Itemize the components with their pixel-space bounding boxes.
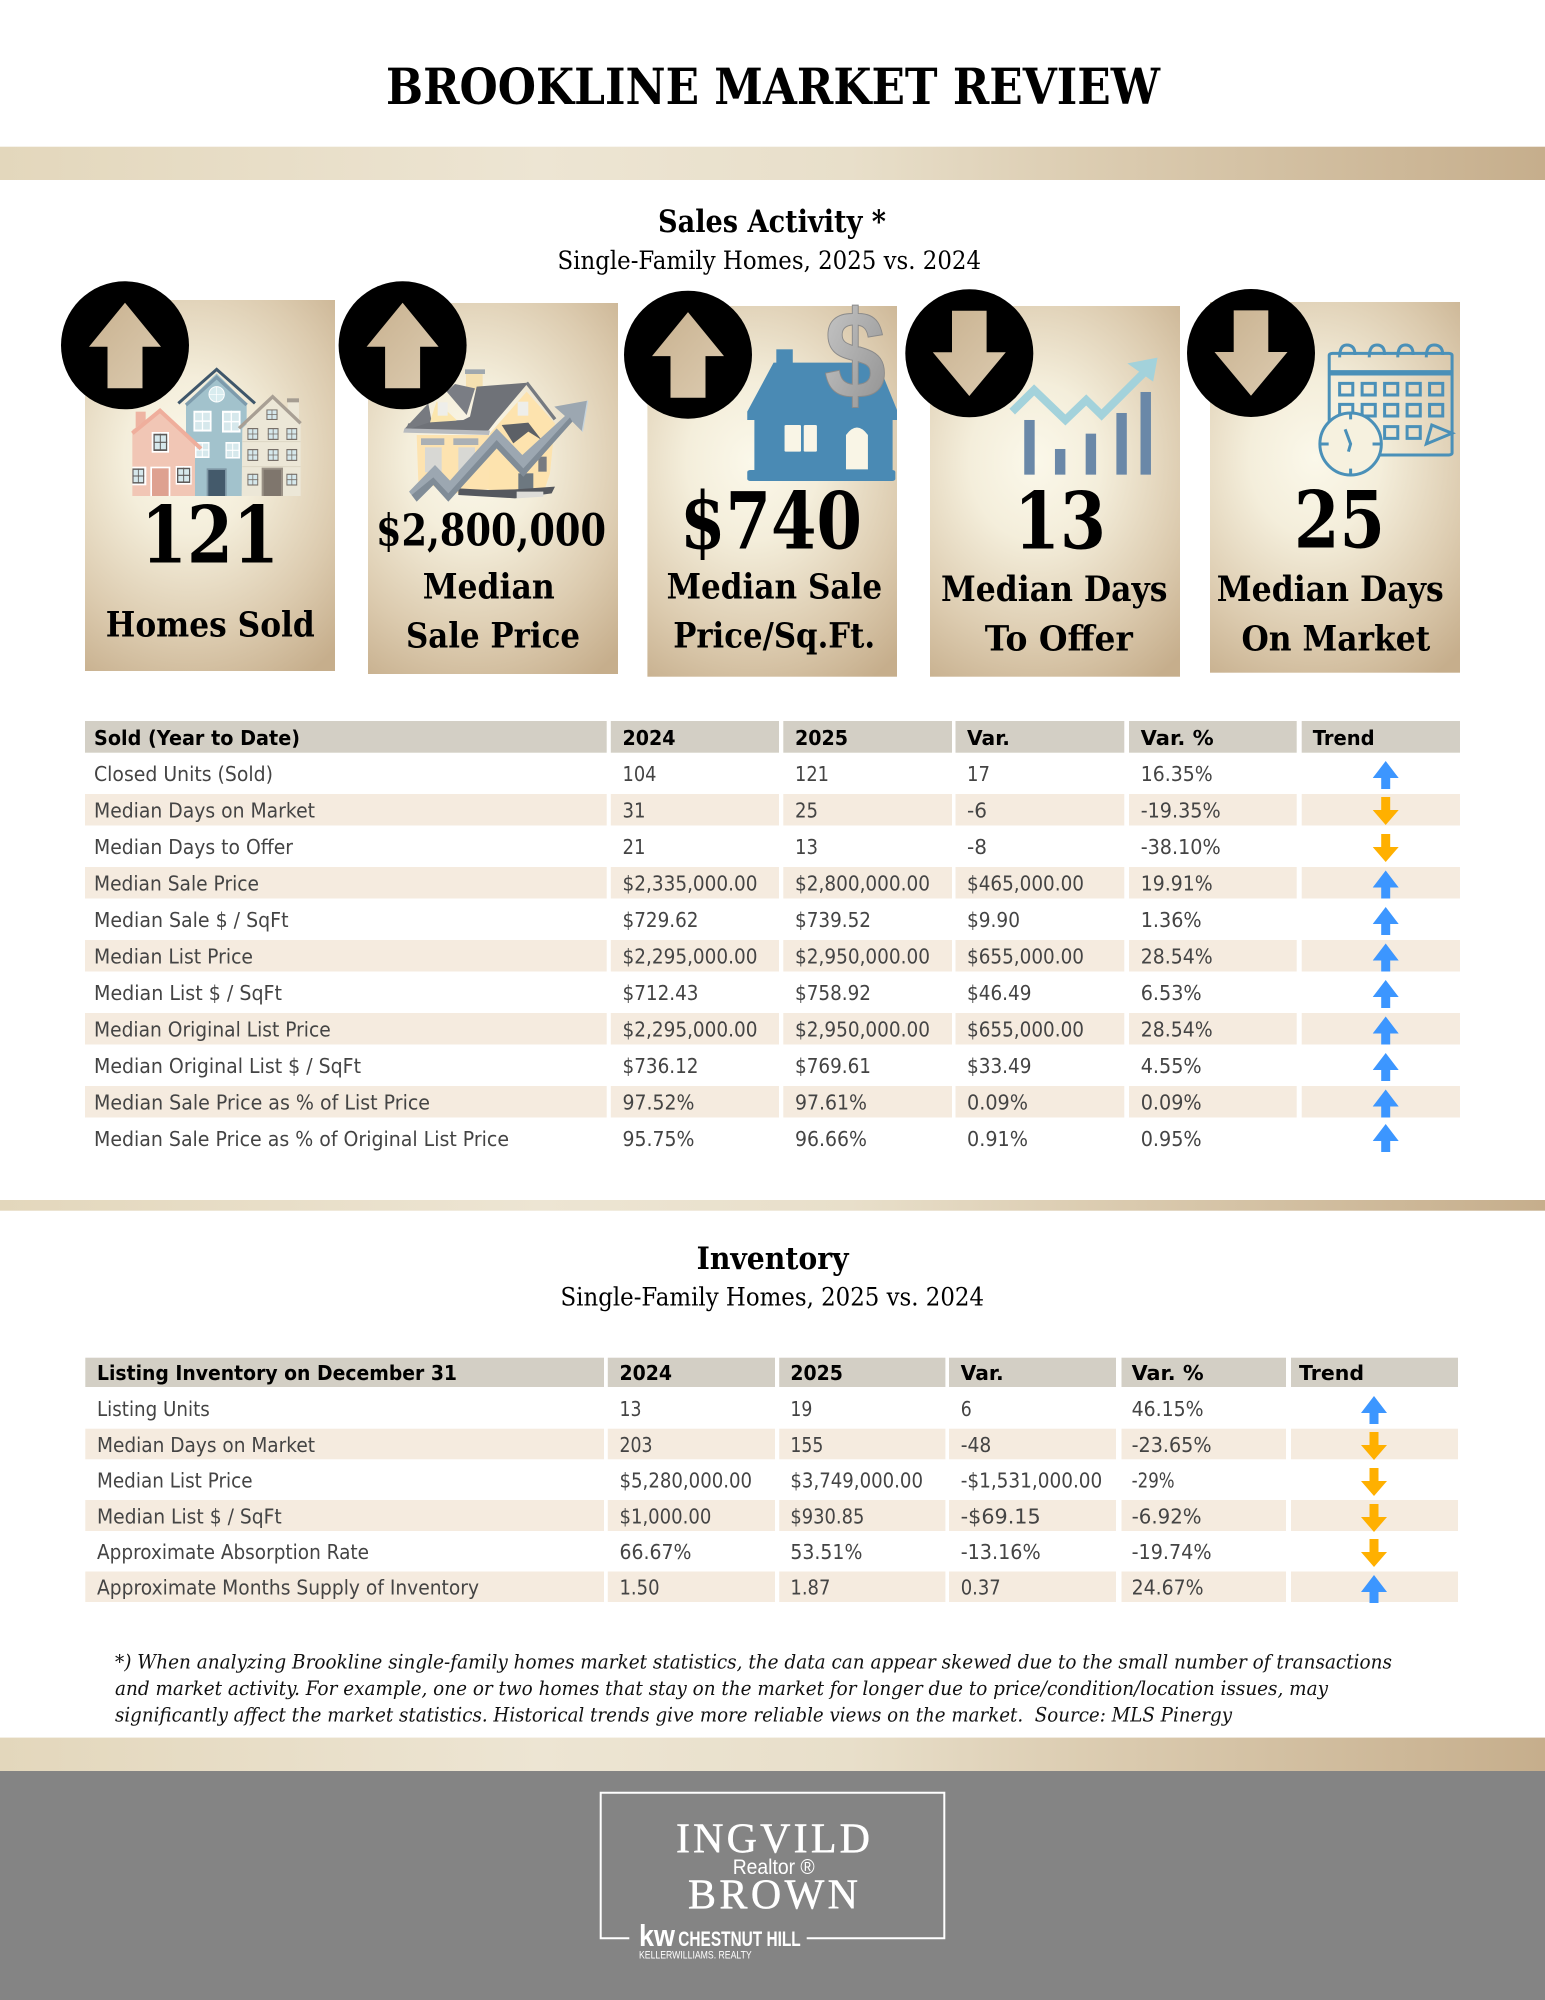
- row: median sale price: $465,000.00: [967, 872, 1084, 896]
- row: closed units: [94, 761, 1399, 789]
- panel: median sale price per square foot card: Median Sale: [667, 567, 882, 607]
- top gold band: [0, 147, 1545, 180]
- panel: median sale price per square foot card: Price/Sq.Ft.: [673, 616, 875, 656]
- row: median days to offer: [94, 834, 1399, 862]
- row: median sale dollars per sqft: $9.90: [967, 908, 1020, 932]
- row: closed units: 16.35%: [1141, 762, 1213, 786]
- row: sale price as percent of list price: 0.09%: [1141, 1091, 1202, 1115]
- row: median list price: $5,280,000.00: [620, 1469, 752, 1493]
- row: median sale dollars per sqft: 1.36%: [1141, 908, 1202, 932]
- table: listing inventory: [85, 1358, 1458, 1603]
- row: approximate months supply: 1.50: [620, 1576, 660, 1600]
- row: sale price as percent of original list price: 0.95%: [1141, 1127, 1202, 1151]
- row: median list dollars per sqft: -$69.15: [961, 1504, 1041, 1528]
- row: median list dollars per sqft: -6.92%: [1132, 1504, 1202, 1528]
- icon: up arrow badge, homes sold: [61, 281, 189, 409]
- heading: sales activity: Single-Family Homes, 2025 vs. 2024: [558, 246, 981, 275]
- footnote: significantly affect the market statistics. Historical trends give more reliable views on the market. Source: MLS Pinergy: [115, 1702, 1233, 1726]
- row: approximate months supply: [85, 1572, 1458, 1603]
- panel: median days on market card: On Market: [1242, 620, 1430, 660]
- row: median list price: $2,295,000.00: [622, 945, 758, 969]
- row: median sale price: $2,800,000.00: [795, 872, 930, 896]
- row: median list dollars per sqft: $1,000.00: [620, 1504, 711, 1528]
- row: median original list dollars per sqft: $769.61: [795, 1054, 871, 1078]
- logo: Ingvild Brown Realtor, KW Chestnut Hill: [601, 1793, 944, 1961]
- footnote: [115, 1650, 1392, 1726]
- row: median list dollars per sqft: $46.49: [967, 981, 1032, 1005]
- logo: Ingvild Brown Realtor, KW Chestnut Hill: CHESTNUT HILL: [678, 1928, 801, 1951]
- table header: 2025: [795, 726, 848, 750]
- table header: Listing Inventory on December 31: [97, 1361, 457, 1385]
- heading: inventory: Single-Family Homes, 2025 vs. 2024: [560, 1282, 984, 1312]
- row: median list price: -$1,531,000.00: [961, 1469, 1102, 1493]
- row: approximate months supply: 1.87: [790, 1576, 830, 1600]
- row: sale price as percent of original list price: 95.75%: [622, 1127, 694, 1151]
- table header: [85, 1358, 1458, 1387]
- row: median sale dollars per sqft: Median Sale $ / SqFt: [94, 908, 289, 932]
- logo: Ingvild Brown Realtor, KW Chestnut Hill: BROWN: [688, 1872, 858, 1918]
- panel: median sale price card: $2,800,000: [376, 505, 606, 556]
- row: median days to offer: 21: [622, 835, 646, 859]
- row: median original list dollars per sqft: [94, 1053, 1399, 1081]
- row: median list dollars per sqft: Median List $ / SqFt: [97, 1504, 282, 1528]
- row: approximate months supply: 24.67%: [1132, 1576, 1204, 1600]
- icon: bar chart with trend line: [1012, 358, 1158, 475]
- row: approximate absorption rate: 66.67%: [620, 1540, 692, 1564]
- row: listing units: 19: [790, 1397, 812, 1421]
- heading: sales activity: [558, 204, 981, 275]
- icon: house with rising arrow: [403, 369, 588, 502]
- table header: Var. %: [1141, 726, 1214, 750]
- heading: sales activity: Sales Activity *: [658, 204, 886, 240]
- row: approximate absorption rate: -19.74%: [1132, 1540, 1212, 1564]
- row: median list dollars per sqft: [94, 980, 1399, 1008]
- row: sale price as percent of list price: 97.52%: [622, 1091, 694, 1115]
- row: sale price as percent of original list price: Median Sale Price as % of Original List Price: [94, 1127, 509, 1151]
- row: listing units: [97, 1396, 1387, 1424]
- table header: 2024: [622, 726, 676, 750]
- row: median days to offer: Median Days to Offer: [94, 835, 294, 859]
- panel: median days on market card: 25: [1294, 473, 1385, 566]
- row: median days on market: 203: [620, 1433, 652, 1457]
- row: median days on market: 31: [622, 799, 646, 823]
- row: median list price: Median List Price: [97, 1469, 253, 1493]
- panel: median sale price per square foot card: [647, 286, 897, 677]
- row: median list price: $655,000.00: [967, 945, 1084, 969]
- icon: calendar with clock: [1320, 345, 1452, 475]
- row: median sale price: [85, 867, 1460, 898]
- row: approximate months supply: Approximate Months Supply of Inventory: [97, 1576, 479, 1600]
- panel: median sale price card: Sale Price: [406, 616, 580, 656]
- panel: median sale price card: Median: [423, 568, 555, 608]
- row: median days on market: -48: [961, 1433, 991, 1457]
- logo: Ingvild Brown Realtor, KW Chestnut Hill: INGVILD: [676, 1817, 870, 1863]
- footnote: *) When analyzing Brookline single-family homes market statistics, the data can appear skewed due to the small number of transactions: [115, 1650, 1392, 1674]
- row: closed units: 121: [795, 762, 829, 786]
- row: median original list dollars per sqft: $33.49: [967, 1054, 1032, 1078]
- icon: down arrow badge, days on market: [1187, 289, 1315, 417]
- row: median list dollars per sqft: [85, 1500, 1458, 1532]
- row: median days on market: Median Days on Market: [97, 1433, 315, 1457]
- icon: up arrow badge, price per sq ft: [624, 291, 752, 419]
- row: median sale price: $2,335,000.00: [622, 872, 758, 896]
- row: median days on market: -6: [967, 799, 987, 823]
- heading: inventory: [560, 1241, 984, 1312]
- row: median list price: 28.54%: [1141, 945, 1213, 969]
- panel: median days to offer card: 13: [1014, 474, 1106, 567]
- icon: down arrow badge, days to offer: [905, 289, 1033, 417]
- row: approximate absorption rate: -13.16%: [961, 1540, 1041, 1564]
- row: median original list dollars per sqft: Median Original List $ / SqFt: [94, 1054, 361, 1078]
- row: sale price as percent of list price: 97.61%: [795, 1091, 867, 1115]
- row: approximate absorption rate: 53.51%: [790, 1540, 862, 1564]
- row: listing units: Listing Units: [97, 1397, 210, 1421]
- row: closed units: 104: [622, 762, 656, 786]
- row: median days to offer: -38.10%: [1141, 835, 1221, 859]
- table: sold year to date: [85, 721, 1460, 1152]
- row: sale price as percent of list price: Median Sale Price as % of List Price: [94, 1091, 430, 1115]
- row: median days to offer: -8: [967, 835, 987, 859]
- panel: homes sold card: Homes Sold: [106, 606, 315, 646]
- icon: row of houses: [132, 369, 301, 496]
- row: listing units: 6: [961, 1397, 972, 1421]
- row: median list price: [97, 1468, 1387, 1496]
- table header: Var.: [961, 1361, 1004, 1385]
- row: sale price as percent of original list price: [94, 1124, 1399, 1152]
- icon: blue house with dollar sign: [747, 286, 897, 481]
- panel: median days on market card: [1210, 302, 1460, 673]
- row: sale price as percent of original list price: 96.66%: [795, 1127, 867, 1151]
- table header: Var. %: [1132, 1361, 1204, 1385]
- table header: 2024: [620, 1361, 672, 1385]
- logo: Ingvild Brown Realtor, KW Chestnut Hill: KELLERWILLIAMS. REALTY: [639, 1949, 752, 1961]
- logo: Ingvild Brown Realtor, KW Chestnut Hill: Realtor ®: [733, 1856, 815, 1879]
- row: median list dollars per sqft: $758.92: [795, 981, 871, 1005]
- row: median original list price: 28.54%: [1141, 1018, 1213, 1042]
- bottom gold band: [0, 1738, 1545, 1771]
- row: median original list price: $2,950,000.00: [795, 1018, 930, 1042]
- footer panel: [0, 1771, 1545, 2000]
- middle gold band: [0, 1200, 1545, 1211]
- row: median sale price: 19.91%: [1141, 872, 1213, 896]
- panel: homes sold card: 121: [141, 489, 279, 582]
- row: median list price: Median List Price: [94, 945, 253, 969]
- row: median list price: $2,950,000.00: [795, 945, 930, 969]
- row: median days on market: 155: [790, 1433, 823, 1457]
- row: closed units: 17: [967, 762, 990, 786]
- row: median original list price: [85, 1013, 1460, 1044]
- row: approximate absorption rate: [97, 1539, 1387, 1567]
- panel: median sale price per square foot card: $740: [680, 474, 862, 567]
- row: median list dollars per sqft: Median List $ / SqFt: [94, 981, 282, 1005]
- row: median original list price: Median Original List Price: [94, 1018, 331, 1042]
- row: median sale dollars per sqft: $739.52: [795, 908, 871, 932]
- row: median original list price: $655,000.00: [967, 1018, 1084, 1042]
- panel: median days to offer card: To Offer: [985, 620, 1134, 660]
- row: closed units: Closed Units (Sold): [94, 762, 273, 786]
- row: median original list price: $2,295,000.00: [622, 1018, 758, 1042]
- heading: inventory: Inventory: [697, 1241, 849, 1277]
- table header: Var.: [967, 726, 1010, 750]
- row: median list dollars per sqft: $930.85: [790, 1504, 864, 1528]
- icon: blue house with dollar sign: $: [824, 286, 886, 425]
- row: median days on market: 25: [795, 799, 818, 823]
- row: sale price as percent of list price: [85, 1086, 1460, 1118]
- row: median days to offer: 13: [795, 835, 818, 859]
- footnote: and market activity. For example, one or two homes that stay on the market for longer due to price/condition/location issues, may: [115, 1676, 1329, 1700]
- row: median days on market: -19.35%: [1141, 799, 1221, 823]
- table header: Sold (Year to Date): [94, 726, 300, 750]
- icon: up arrow badge, sale price: [339, 281, 467, 409]
- row: median list price: -29%: [1132, 1469, 1175, 1493]
- row: median list price: [85, 940, 1460, 972]
- row: listing units: 46.15%: [1132, 1397, 1204, 1421]
- logo: Ingvild Brown Realtor, KW Chestnut Hill: kw: [639, 1918, 676, 1953]
- row: median days on market: [85, 794, 1460, 826]
- row: sale price as percent of list price: 0.09%: [967, 1091, 1028, 1115]
- panel: median days to offer card: [930, 306, 1180, 677]
- row: sale price as percent of original list price: 0.91%: [967, 1127, 1028, 1151]
- title: BROOKLINE MARKET REVIEW: [386, 57, 1161, 116]
- panel: median days to offer card: Median Days: [941, 570, 1168, 610]
- row: approximate months supply: 0.37: [961, 1576, 1001, 1600]
- row: median original list dollars per sqft: $736.12: [622, 1054, 698, 1078]
- table header: Trend: [1299, 1361, 1364, 1385]
- table header: Trend: [1313, 726, 1375, 750]
- panel: median days on market card: Median Days: [1217, 570, 1444, 610]
- row: median days on market: -23.65%: [1132, 1433, 1212, 1457]
- row: median original list dollars per sqft: 4.55%: [1141, 1054, 1202, 1078]
- row: approximate absorption rate: Approximate Absorption Rate: [97, 1540, 369, 1564]
- row: median list dollars per sqft: 6.53%: [1141, 981, 1202, 1005]
- panel: median sale price card: [368, 303, 618, 674]
- row: median sale dollars per sqft: $729.62: [622, 908, 698, 932]
- row: median list dollars per sqft: $712.43: [622, 981, 698, 1005]
- panel: homes sold card: [85, 300, 335, 671]
- row: median sale price: Median Sale Price: [94, 872, 259, 896]
- table header: [85, 721, 1460, 753]
- row: median list price: $3,749,000.00: [790, 1469, 923, 1493]
- row: listing units: 13: [620, 1397, 642, 1421]
- row: median days on market: [85, 1429, 1458, 1460]
- row: median sale dollars per sqft: [94, 907, 1399, 935]
- table header: 2025: [790, 1361, 843, 1385]
- row: median days on market: Median Days on Market: [94, 799, 315, 823]
